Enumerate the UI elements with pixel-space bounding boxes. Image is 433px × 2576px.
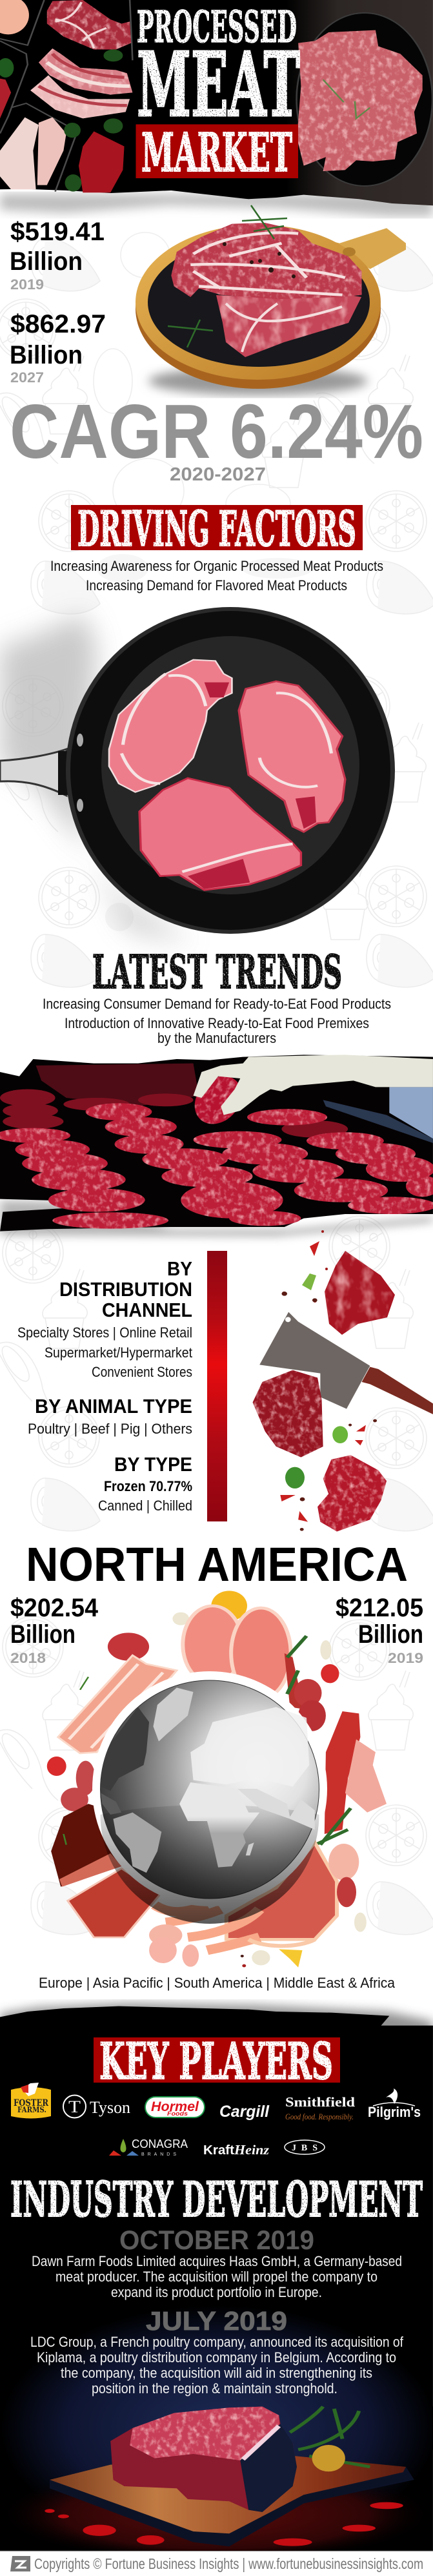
development: october 2019: meat producer. The acquisition will propel the company to xyxy=(55,2269,378,2285)
frying pan with steaks xyxy=(0,607,395,943)
header meat photo: trays and cuts xyxy=(0,0,132,192)
logo: conagra brands: CONAGRA xyxy=(132,2138,188,2150)
logo: tyson: Tyson xyxy=(90,2098,130,2117)
animal list: Poultry | Beef | Pig | Others xyxy=(28,1421,192,1437)
latest trends text xyxy=(43,996,391,1046)
CAGR: 2020-2027 xyxy=(170,464,266,485)
logo: foster farms: FOSTER xyxy=(14,2098,48,2108)
steak xyxy=(110,2407,297,2512)
logo: kraft heinz: Kraft xyxy=(203,2143,234,2158)
value 2019 xyxy=(10,218,105,293)
cleaver blade xyxy=(259,1312,370,1409)
value 2018: $202.54 xyxy=(10,1594,99,1622)
value 2027: $862.97 xyxy=(10,310,106,338)
by distribution channel xyxy=(59,1257,192,1321)
driving factors text: Increasing Demand for Flavored Meat Products xyxy=(86,577,347,593)
distribution list: Specialty Stores | Online Retail xyxy=(17,1324,192,1341)
logo: conagra brands xyxy=(109,2138,188,2157)
value 2019: Billion xyxy=(10,247,83,276)
north america heading: NORTH AMERICA xyxy=(26,1538,408,1591)
development: october 2019 xyxy=(32,2225,402,2300)
value 2018: Billion xyxy=(10,1620,76,1649)
by distribution channel: DISTRIBUTION xyxy=(59,1278,192,1301)
value 2027: Billion xyxy=(10,341,83,369)
by distribution channel: CHANNEL xyxy=(102,1299,192,1321)
logo: smithfield: Smithfield xyxy=(285,2094,355,2110)
segmentation text xyxy=(17,1257,192,1514)
logo: cargill: Cargill xyxy=(219,2103,270,2121)
market values xyxy=(10,218,106,386)
value 2019: 2019 xyxy=(10,276,44,293)
steak 1 xyxy=(109,660,232,792)
logo: jbs: JBS xyxy=(292,2143,317,2153)
type list: Frozen 70.77% xyxy=(104,1478,192,1494)
logo: conagra brands: BRANDS xyxy=(141,2152,176,2157)
cleaver handle xyxy=(362,1367,433,1414)
logo: pilgrim's: Pilgrim's xyxy=(368,2104,421,2120)
development: july 2019: the company, the acquisition will aid in strengthening its xyxy=(61,2365,372,2381)
patty production photo xyxy=(0,1055,433,1237)
logo: foster farms: FARMS. xyxy=(17,2105,46,2114)
header banner xyxy=(0,0,433,216)
segmentation bar xyxy=(207,1251,227,1521)
steak 2 xyxy=(239,681,345,832)
by distribution channel: BY xyxy=(167,1257,192,1280)
logo: kraft heinz: Heinz xyxy=(234,2142,270,2158)
latest trends text: Increasing Consumer Demand for Ready-to-Eat Food Products xyxy=(43,996,391,1012)
type list: Canned | Chilled xyxy=(98,1498,192,1514)
development: july 2019: Kiplama, a poultry distribution company in Belgium. According to xyxy=(37,2349,396,2365)
logo: hormel foods: Hormel xyxy=(151,2099,199,2114)
herbs and peppers xyxy=(280,1292,377,1531)
by animal type: BY ANIMAL TYPE xyxy=(35,1395,192,1417)
driving factors text: Increasing Awareness for Organic Processed Meat Products xyxy=(50,558,383,574)
logos xyxy=(11,2083,421,2158)
value 2019: $519.41 xyxy=(10,218,105,246)
logo: smithfield: Good food. Responsibly. xyxy=(285,2112,354,2121)
title: MEAT xyxy=(137,33,300,137)
logo: hormel foods xyxy=(145,2097,205,2117)
value 2019 north america: $212.05 xyxy=(336,1594,423,1622)
development: july 2019 xyxy=(30,2306,404,2396)
meat on wooden board xyxy=(136,205,406,395)
icon: fortune business insights logo xyxy=(10,2556,30,2571)
globe surrounded by processed meats xyxy=(47,1591,387,1968)
development: october 2019: expand its product portfolio in Europe. xyxy=(111,2284,322,2300)
distribution list xyxy=(17,1324,192,1380)
value 2019 north america: 2019 xyxy=(388,1650,423,1666)
steak middle xyxy=(253,1370,323,1458)
value 2019 north america xyxy=(336,1594,423,1666)
driving factors text xyxy=(50,558,383,593)
logo: jbs xyxy=(285,2140,325,2154)
development: july 2019: JULY 2019 xyxy=(146,2306,287,2336)
value 2027: 2027 xyxy=(10,369,44,386)
latest trends text: by the Manufacturers xyxy=(157,1030,276,1046)
development: october 2019: OCTOBER 2019 xyxy=(119,2225,314,2255)
raw meat with cleaver illustration xyxy=(253,1230,433,1532)
herbs and fruit xyxy=(290,2407,370,2467)
title xyxy=(136,1,300,184)
value 2027 xyxy=(10,310,106,386)
value 2018 xyxy=(10,1594,99,1666)
other regions list: Europe | Asia Pacific | South America | Middle East & Africa xyxy=(39,1975,396,1991)
title: MARKET xyxy=(141,122,292,184)
development: july 2019: position in the region & maintain stronghold. xyxy=(92,2380,337,2396)
type list xyxy=(98,1478,192,1514)
by type: BY TYPE xyxy=(114,1453,192,1476)
value 2018: 2018 xyxy=(10,1650,46,1666)
logo: tyson: T xyxy=(68,2097,81,2116)
steak bottom xyxy=(317,1455,387,1532)
logo: kraft heinz xyxy=(203,2142,270,2158)
logo: tyson xyxy=(63,2095,130,2118)
steak top xyxy=(325,1251,395,1335)
logo: smithfield xyxy=(285,2094,355,2121)
logo: foster farms xyxy=(11,2083,51,2118)
logo: hormel foods: Foods xyxy=(167,2110,188,2117)
latest trends text: Introduction of Innovative Ready-to-Eat Food Premixes xyxy=(65,1015,369,1031)
logo: pilgrim's xyxy=(368,2088,421,2120)
steak 3 xyxy=(139,778,301,890)
header background with torn edge xyxy=(0,0,433,205)
steak on cutting board scene xyxy=(0,2305,433,2568)
meats around the globe xyxy=(47,1591,387,1946)
distribution list: Convenient Stores xyxy=(92,1364,192,1380)
dark lower section xyxy=(0,2003,433,2551)
globe xyxy=(92,1671,327,1924)
distribution list: Supermarket/Hypermarket xyxy=(45,1345,192,1361)
ground meat on black plate xyxy=(297,13,432,186)
footer xyxy=(0,2551,433,2576)
